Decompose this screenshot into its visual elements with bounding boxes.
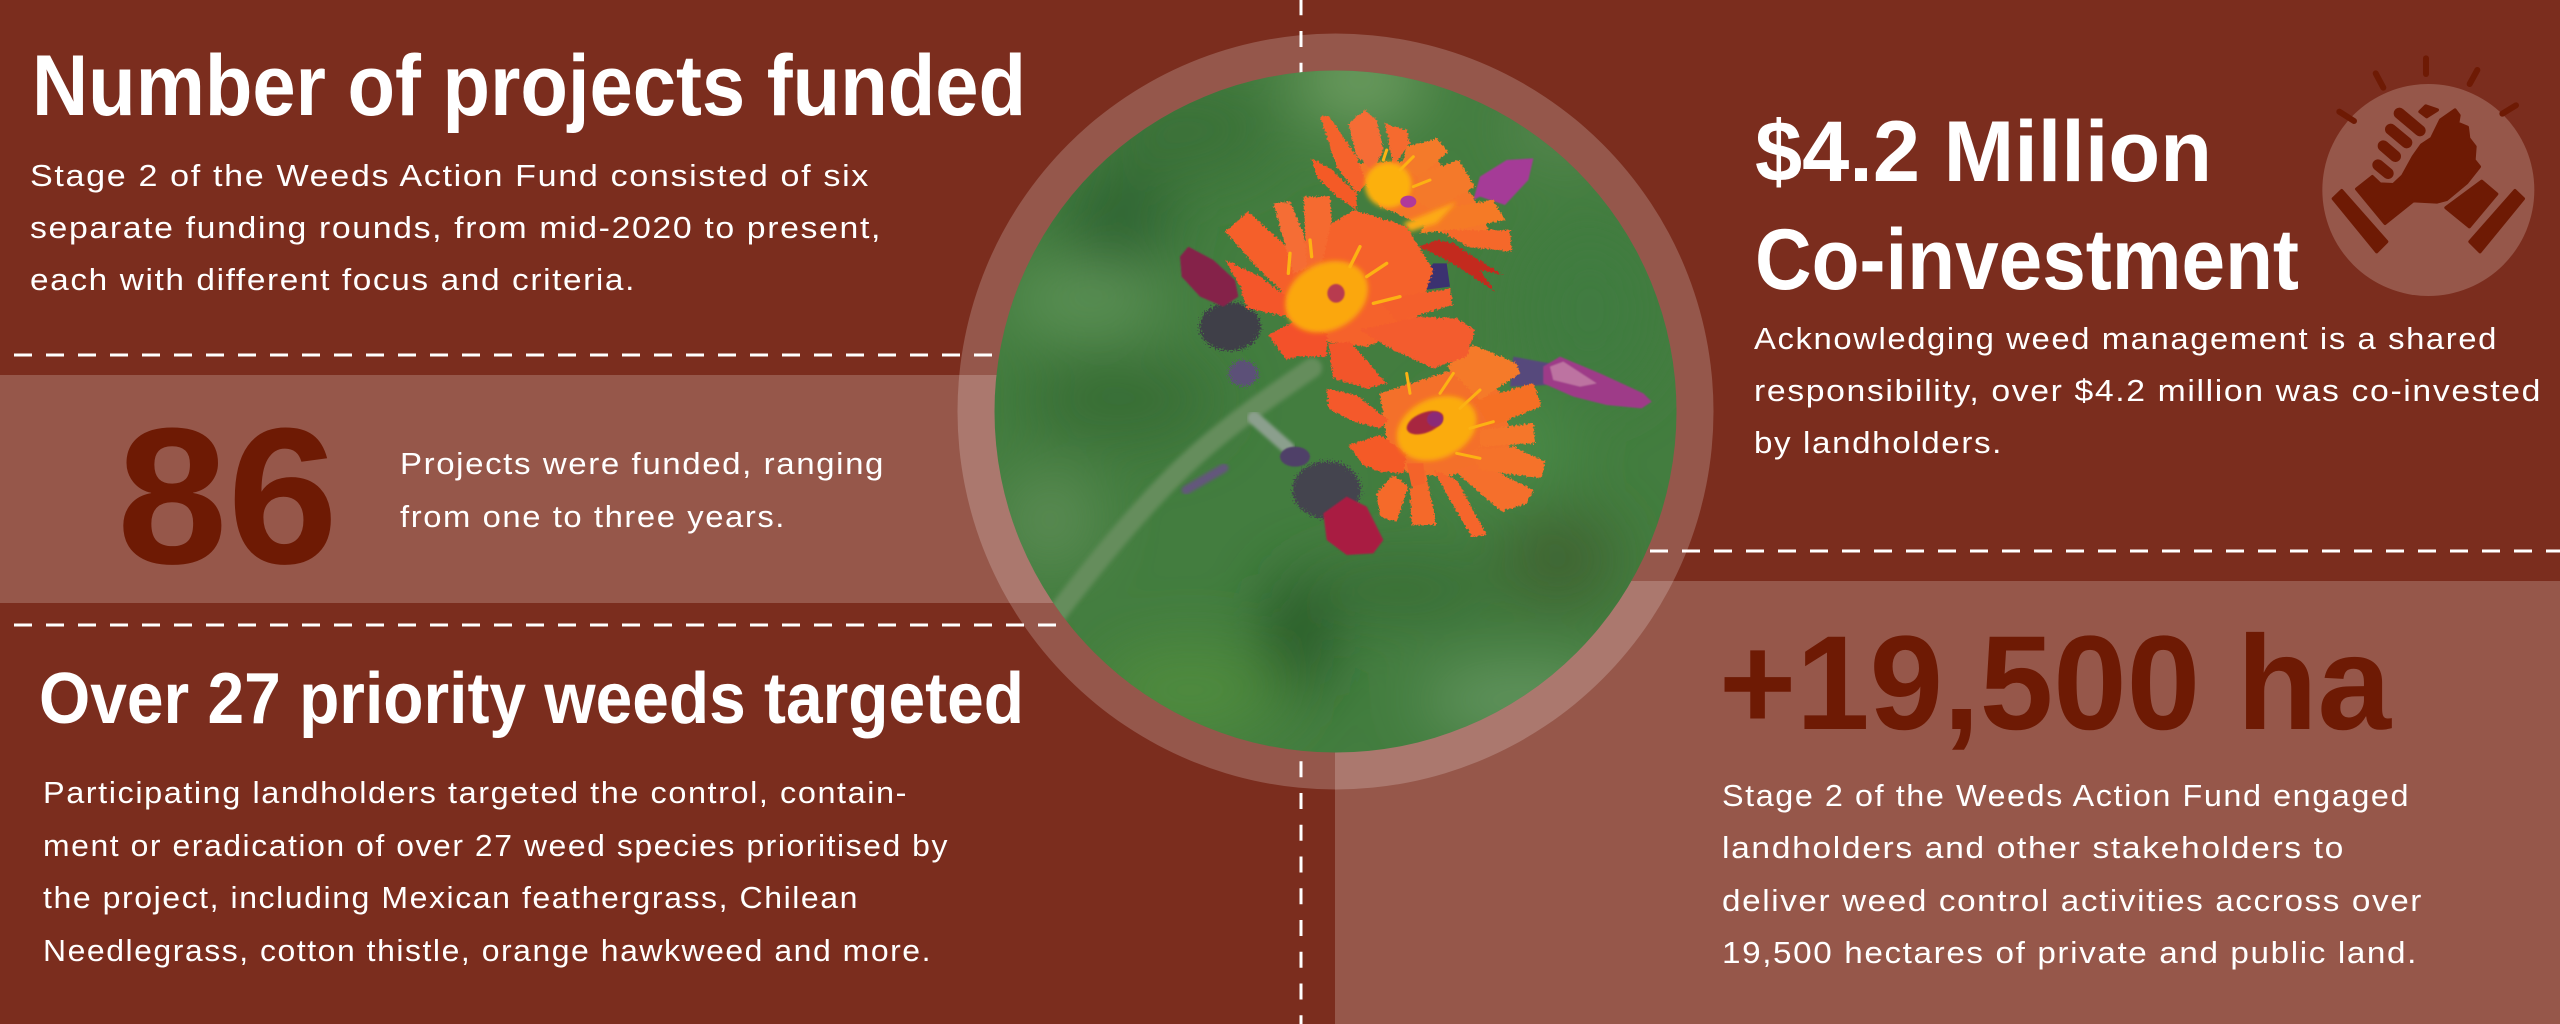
body text: [30, 158, 882, 297]
bud: upper left magenta: [1180, 247, 1238, 307]
body text: ment or eradication of over 27 weed species prioritised by: [43, 828, 949, 863]
stem: [1052, 368, 1312, 620]
photo: orange hawkweed flowers: [990, 35, 1680, 758]
body text: deliver weed control activities accross over: [1722, 883, 2423, 918]
stat: hectares: [1719, 609, 2423, 970]
body text: by landholders.: [1754, 425, 2003, 460]
bud: small purple: [1229, 361, 1258, 386]
body text: Acknowledging weed management is a shared: [1754, 321, 2498, 356]
big number: +19,500 ha: [1719, 609, 2392, 758]
heading: Co-investment: [1755, 212, 2299, 308]
stat: 86 projects: [117, 388, 885, 605]
bud: lower small purple: [1280, 447, 1310, 467]
stat description: from one to three years.: [400, 499, 786, 534]
panel: 86 stat band: [0, 375, 1335, 603]
bud: upper left dark hairy: [1199, 303, 1261, 351]
flower: lower: [1327, 345, 1545, 537]
stat description: Projects were funded, ranging: [400, 446, 885, 481]
body text: [1754, 321, 2542, 460]
body text: Needlegrass, cotton thistle, orange hawkweed and more.: [43, 933, 932, 968]
bud: right purple: [1510, 357, 1652, 408]
body text: [1722, 778, 2423, 970]
icon: handshake: [2322, 58, 2534, 296]
heading: $4.2 Million: [1755, 104, 2212, 200]
panel: hectares stat: [1335, 581, 2560, 1024]
bud: lower red: [1323, 497, 1383, 555]
big number: 86: [117, 388, 338, 605]
stat description: [400, 446, 885, 534]
body text: the project, including Mexican feathergrass, Chilean: [43, 880, 859, 915]
photo background: blurred green foliage: [990, 35, 1680, 758]
photo ring: [958, 34, 1714, 790]
body text: responsibility, over $4.2 million was co-invested: [1754, 373, 2542, 408]
panel: number of projects funded: [30, 38, 1026, 297]
buds behind middle flower: [1426, 263, 1450, 290]
flower top centre: [1365, 150, 1457, 232]
body text: separate funding rounds, from mid-2020 to present,: [30, 210, 882, 245]
body text: landholders and other stakeholders to: [1722, 830, 2345, 865]
body text: 19,500 hectares of private and public land.: [1722, 935, 2418, 970]
flower: middle: [1225, 197, 1475, 388]
bud: top right purple: [1473, 158, 1533, 205]
flowers and buds: [1180, 110, 1652, 555]
flower lower centre: [1386, 373, 1493, 487]
body text: Participating landholders targeted the control, contain-: [43, 775, 908, 810]
heading: Over 27 priority weeds targeted: [39, 659, 1024, 739]
bud: lower dark hairy: [1293, 461, 1361, 519]
panel: co-investment: [1754, 58, 2542, 460]
heading: Number of projects funded: [32, 38, 1026, 134]
body text: each with different focus and criteria.: [30, 262, 636, 297]
flower: top: [1312, 110, 1512, 292]
body text: Stage 2 of the Weeds Action Fund consisted of six: [30, 158, 870, 193]
panel: priority weeds: [39, 659, 1024, 968]
body text: Stage 2 of the Weeds Action Fund engaged: [1722, 778, 2410, 813]
flower middle centre: [1282, 238, 1402, 336]
body text: [43, 775, 949, 968]
heading: [1755, 104, 2299, 308]
